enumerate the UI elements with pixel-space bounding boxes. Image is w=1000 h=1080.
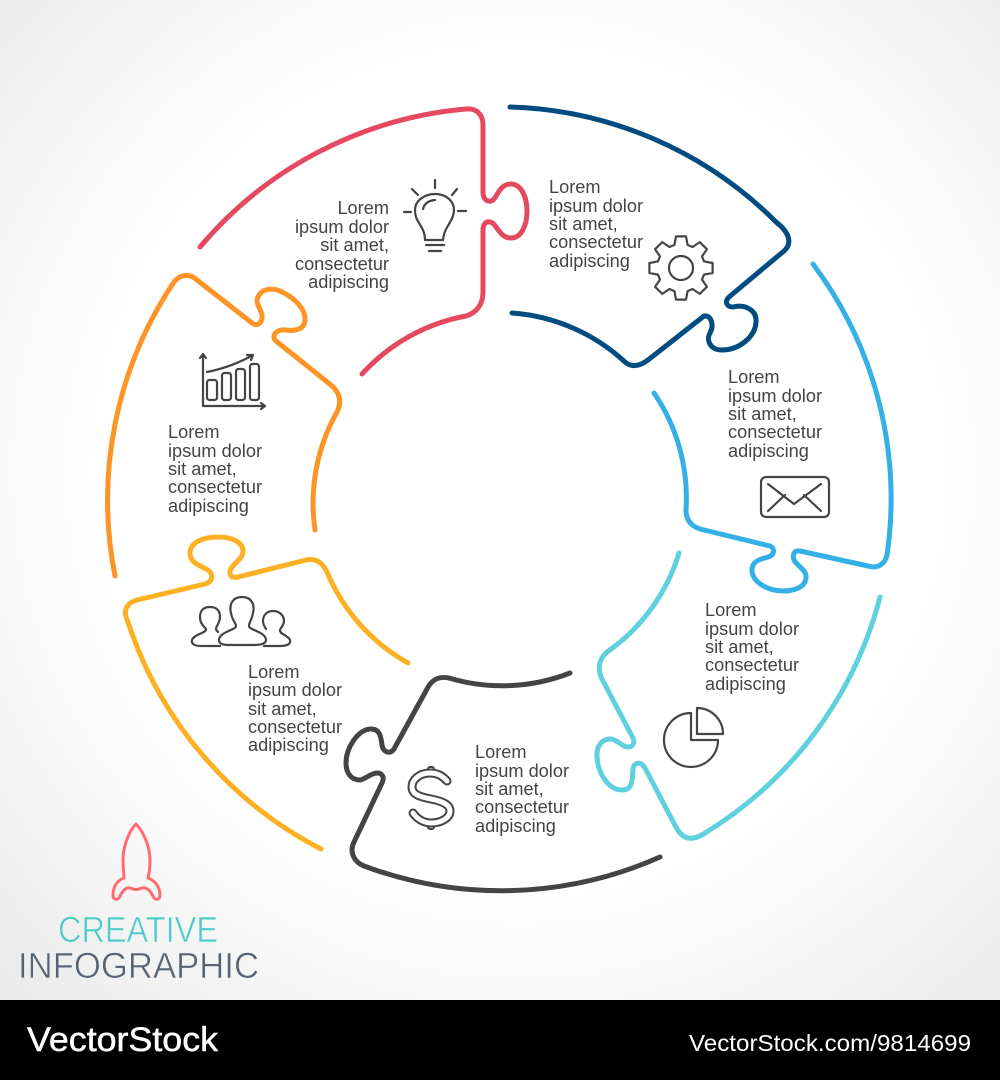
icon: pie chart [664, 708, 723, 767]
title line: creative: CREATIVE [58, 909, 218, 950]
dark blue outline [510, 107, 789, 366]
title [18, 909, 259, 986]
text: teal block: sit amet, [705, 637, 774, 657]
icon: dollar sign [412, 767, 450, 829]
text: orange block: adipiscing [168, 496, 249, 516]
icon: rocket [113, 824, 160, 899]
text: sky blue block: sit amet, [728, 404, 797, 424]
icon: bar chart [200, 354, 265, 409]
panel: red puzzle piece [200, 109, 527, 374]
panel: orange puzzle piece [108, 275, 340, 576]
text: teal block: ipsum dolor [705, 619, 799, 639]
dark gray outline [346, 673, 660, 891]
text: dark gray block: Lorem [475, 742, 527, 762]
text: red block: Lorem [337, 198, 389, 218]
text: dark blue block: adipiscing [549, 251, 630, 271]
text: teal block: consectetur [705, 655, 799, 675]
text: red block: ipsum dolor [295, 217, 389, 237]
text: dark gray block: consectetur [475, 797, 569, 817]
watermark logo: VectorStock [27, 1021, 219, 1059]
text: gold block: ipsum dolor [248, 680, 342, 700]
text: gold block: adipiscing [248, 735, 329, 755]
text: orange block: Lorem [168, 422, 220, 442]
text: teal block: adipiscing [705, 674, 786, 694]
text: sky blue block: Lorem [728, 367, 780, 387]
gold outline [125, 537, 408, 849]
text: orange block: sit amet, [168, 459, 237, 479]
text: red block: consectetur [295, 254, 389, 274]
icon: envelope [761, 477, 829, 517]
text: orange block: ipsum dolor [168, 441, 262, 461]
teal outline [597, 553, 880, 838]
text: sky blue block: adipiscing [728, 441, 809, 461]
watermark url: VectorStock.com/9814699 [689, 1030, 971, 1056]
sky blue outline [654, 264, 891, 591]
icon: people [192, 597, 290, 646]
text: red block: sit amet, [320, 235, 389, 255]
text: dark blue block: Lorem [549, 177, 601, 197]
panel: dark gray puzzle piece [346, 673, 660, 891]
text: dark blue block: ipsum dolor [549, 196, 643, 216]
text: dark gray block: ipsum dolor [475, 761, 569, 781]
orange outline [108, 275, 340, 576]
text: orange block: consectetur [168, 477, 262, 497]
watermark bar [0, 1000, 1000, 1080]
text: teal block: Lorem [705, 600, 757, 620]
text: gold block: sit amet, [248, 699, 317, 719]
text: gold block: consectetur [248, 717, 342, 737]
text: dark gray block: sit amet, [475, 779, 544, 799]
text: sky blue block: ipsum dolor [728, 386, 822, 406]
text: dark blue block: sit amet, [549, 214, 618, 234]
text: dark gray block: adipiscing [475, 816, 556, 836]
text: gold block: Lorem [248, 662, 300, 682]
icon: gear [649, 236, 713, 300]
text: sky blue block: consectetur [728, 422, 822, 442]
text: dark blue block: consectetur [549, 232, 643, 252]
panel: gold puzzle piece [125, 537, 408, 849]
panel: dark blue puzzle piece [510, 107, 789, 366]
text: red block: adipiscing [308, 272, 389, 292]
panel: teal puzzle piece [597, 553, 880, 838]
icon: light bulb [404, 180, 466, 251]
red outline [200, 109, 527, 374]
title line: infographic: INFOGRAPHIC [18, 945, 259, 986]
panel: sky blue puzzle piece [654, 264, 891, 591]
